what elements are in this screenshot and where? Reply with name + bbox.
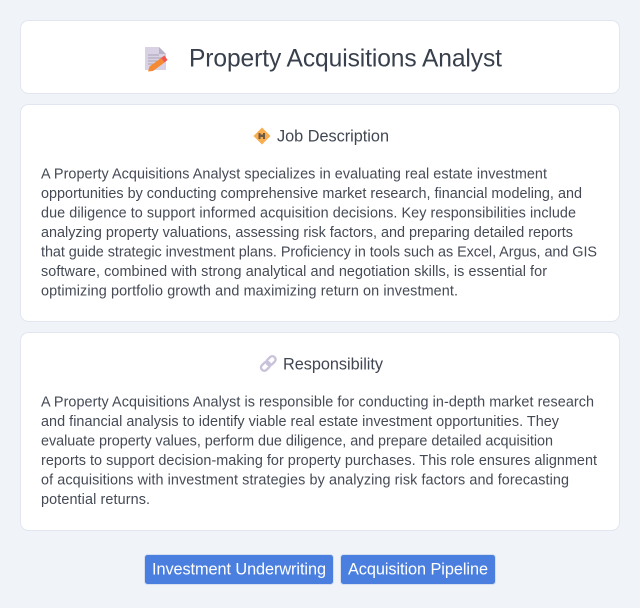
- text block: responsibility: [41, 394, 597, 508]
- text block: job description: [41, 166, 597, 300]
- text block: responsibility: evaluate property values, perform due diligence, and prepare detailed acquisition: [41, 434, 553, 450]
- text block: responsibility: potential returns.: [41, 492, 150, 508]
- text block: job description: analyzing property valuations, assessing risk factors, and preparing detailed reports: [41, 225, 573, 241]
- tag: acquisition pipeline: [340, 554, 496, 584]
- title: Property Acquisitions Analyst: [189, 46, 502, 72]
- text block: job description: software, combined with strong analytical and negotiation skills, is essential for: [41, 264, 547, 280]
- text block: responsibility: A Property Acquisitions Analyst is responsible for conducting in-depth market research: [41, 394, 594, 410]
- panel: job description: [20, 104, 620, 322]
- text block: job description: that guide strategic investment plans. Proficiency in tools such as Excel, Argus, and GIS: [41, 244, 597, 260]
- icon: orange diamond: [254, 128, 270, 144]
- tag: investment underwriting: Investment Underwriting: [152, 560, 326, 578]
- text block: job description: due diligence to support informed acquisition decisions. Key responsibilities include: [41, 206, 576, 222]
- panel: responsibility: [20, 332, 620, 530]
- tag: investment underwriting: [144, 554, 334, 584]
- tag: acquisition pipeline: Acquisition Pipeline: [348, 560, 488, 578]
- heading: responsibility: Responsibility: [283, 356, 384, 374]
- text block: responsibility: and financial analysis to identify viable real estate investment opportunities. They: [41, 414, 560, 430]
- panel: title card: [20, 20, 620, 94]
- icon: document with pencil: [145, 47, 168, 72]
- heading: job description: Job Description: [277, 128, 389, 146]
- text block: responsibility: reports to support decision-making for property purchases. This role ensures alignment: [41, 453, 597, 469]
- text block: job description: opportunities by conducting comprehensive market research, financial modeling, and: [41, 186, 582, 202]
- text block: job description: optimizing portfolio growth and maximizing return on investment.: [41, 284, 458, 300]
- icon: chain link: [260, 355, 277, 372]
- text block: responsibility: of acquisitions with investment strategies by analyzing risk factors and forecasting: [41, 472, 569, 488]
- text block: job description: A Property Acquisitions Analyst specializes in evaluating real estate investment: [41, 166, 547, 182]
